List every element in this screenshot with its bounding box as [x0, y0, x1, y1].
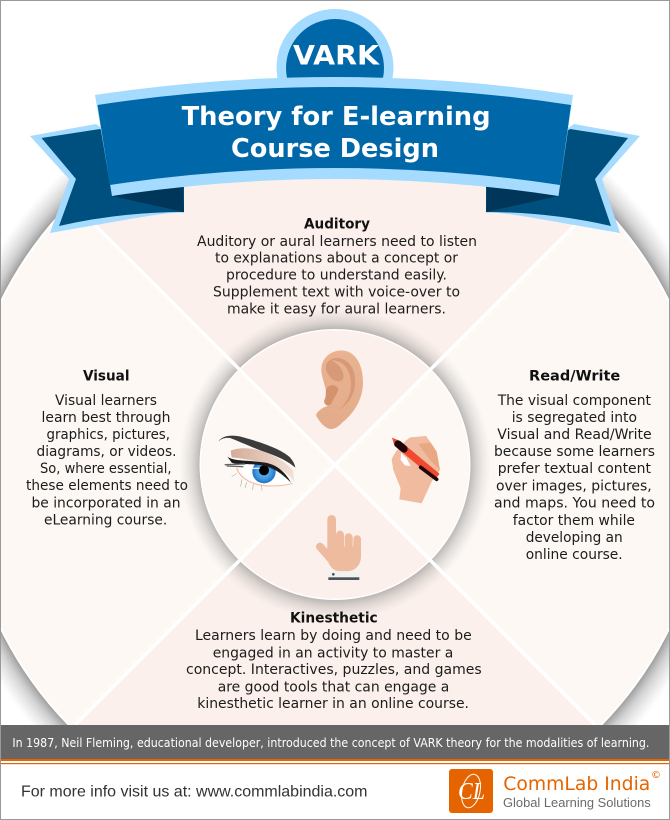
panel: Visual — [26, 369, 188, 529]
heading: Visual: Visual — [83, 369, 130, 385]
text block: Auditory description: to explanations about a concept or — [215, 250, 458, 266]
text block: Read/Write description: online course. — [526, 547, 623, 563]
text block: Visual description: be incorporated in an — [32, 496, 180, 512]
text block: Kinesthetic description: Learners learn by doing and need to be — [195, 628, 472, 644]
text block: Visual description: eLearning course. — [44, 513, 167, 529]
icon: hand holding pen — [392, 436, 440, 503]
text block: Visual description: diagrams, or videos. — [36, 444, 176, 460]
text block: Read/Write description — [494, 393, 655, 563]
panel: central circle with icons — [195, 325, 475, 605]
ribbon tail: right — [486, 124, 640, 233]
text block: Kinesthetic description: concept. Interactives, puzzles, and games — [186, 662, 482, 678]
logo wordmark: CommLab India — [503, 773, 650, 795]
footer link text: For more info visit us at: www.commlabindia.com — [21, 784, 368, 801]
icon: pointing hand — [320, 515, 361, 580]
text block: Read/Write description: developing an — [526, 530, 623, 546]
text block: Kinesthetic description: kinesthetic learner in an online course. — [197, 696, 469, 712]
panel: Auditory — [197, 216, 477, 318]
panel: large circle with four quadrants — [0, 92, 670, 725]
text block: Visual description: graphics, pictures, — [46, 427, 170, 443]
text block: Read/Write description: The visual component — [497, 393, 652, 409]
text block: Auditory description: Auditory or aural learners need to listen — [197, 234, 477, 250]
title text: Theory for E-learning — [182, 102, 491, 132]
title text — [182, 102, 491, 164]
text block: Visual description: these elements need to — [26, 478, 188, 494]
title banner — [30, 9, 640, 233]
text block: Read/Write description: factor them while — [513, 513, 635, 529]
footer white area — [0, 759, 670, 820]
ribbon tail: left — [30, 124, 184, 233]
text block: Visual description: Visual learners — [55, 393, 157, 409]
text block: Auditory description: Supplement text with voice-over to — [213, 284, 460, 300]
logo: CommLab India: © — [651, 770, 661, 781]
callout: history band — [0, 725, 670, 764]
text block: Auditory description — [197, 234, 477, 318]
heading: Read/Write: Read/Write — [529, 369, 620, 385]
ribbon: main band — [95, 77, 573, 196]
logo tagline: Global Learning Solutions — [503, 795, 651, 810]
text block: Read/Write description: prefer textual content — [498, 461, 651, 477]
panel: Read/Write — [494, 369, 655, 563]
text block: Read/Write description: Visual and Read/Write — [497, 427, 652, 443]
icon: eye — [218, 436, 295, 491]
heading: Kinesthetic: Kinesthetic — [290, 611, 378, 627]
badge: VARK — [276, 9, 394, 126]
text block: Kinesthetic description: engaged in an activity to master a — [213, 645, 453, 661]
text block: Visual description: So, where essential, — [40, 461, 172, 477]
text block: Visual description — [26, 393, 188, 529]
text block: Read/Write description: and maps. You need to — [494, 496, 655, 512]
text block: Visual description: learn best through — [42, 410, 170, 426]
text block: Read/Write description: because some learners — [494, 444, 655, 460]
badge: VARK: VARK — [293, 40, 380, 72]
text block: Auditory description: procedure to understand easily. — [226, 268, 447, 284]
text block: Read/Write description: is segregated into — [512, 410, 637, 426]
title text: Course Design — [231, 134, 439, 164]
text block: Kinesthetic description: are good tools that can engage a — [218, 679, 449, 695]
heading: Auditory: Auditory — [304, 216, 370, 232]
icon: CL logo mark: CL — [458, 779, 485, 805]
text block: Read/Write description: over images, pictures, — [496, 479, 652, 495]
panel: Kinesthetic — [186, 611, 482, 712]
text block: Auditory description: make it easy for aural learners. — [227, 302, 446, 318]
text block: Kinesthetic description — [186, 628, 482, 712]
icon: CL logo mark — [449, 769, 493, 813]
icon: ear — [316, 351, 363, 429]
logo: CommLab India — [449, 769, 661, 813]
